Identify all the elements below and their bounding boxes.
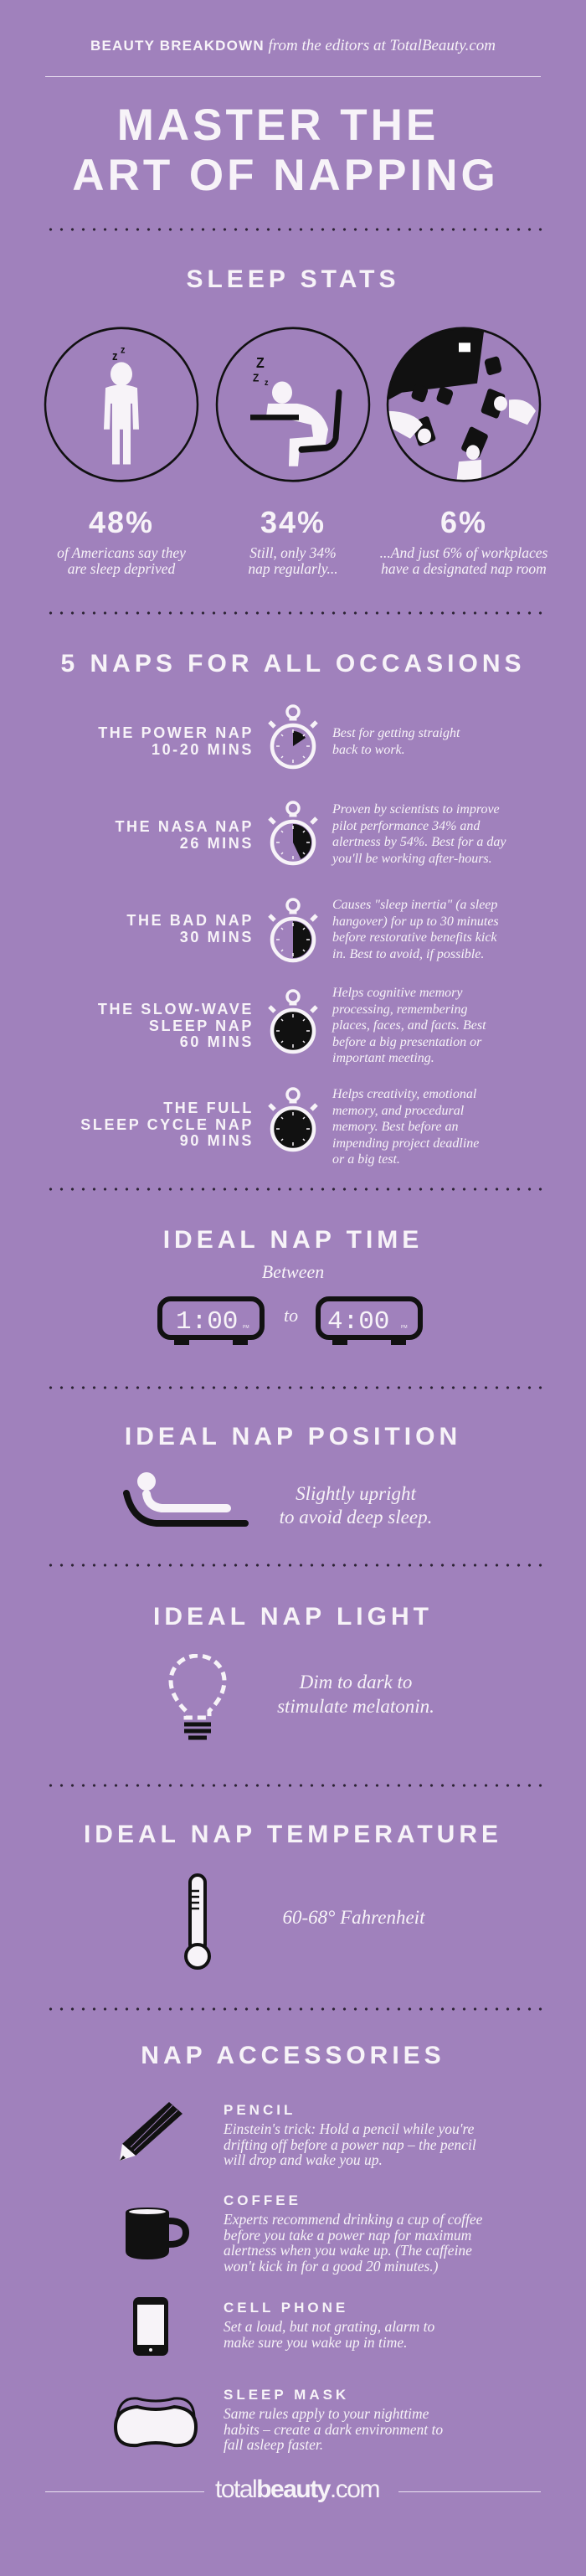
nap: slow-wave: THE SLOW-WAVE: [98, 1001, 254, 1018]
desc: slow-wave: Helps cognitive memory: [332, 986, 463, 1000]
stat: 34%: nap regularly...: [248, 559, 338, 576]
text: temperature: 60-68° Fahrenheit: [283, 1907, 424, 1928]
icon: sleepy person: z: [121, 345, 126, 356]
nap: bad: 30 MINS: [180, 928, 254, 945]
nap: power: THE POWER NAP: [98, 724, 254, 741]
desc: slow-wave: important meeting.: [332, 1051, 434, 1065]
icon: coffee mug: [126, 2208, 189, 2259]
nap: full cycle: 90 MINS: [180, 1132, 254, 1149]
accessory: sleep mask: SLEEP MASK: [224, 2387, 349, 2403]
desc: slow-wave: before a big presentation or: [332, 1035, 481, 1048]
icon: nap room: [387, 327, 541, 482]
desc: slow-wave: [332, 986, 486, 1065]
accessory: cell phone: [224, 2300, 434, 2351]
heading: nap accessories: NAP ACCESSORIES: [141, 2042, 445, 2069]
accessory: coffee: Experts recommend drinking a cup of coffee: [224, 2211, 482, 2228]
text: position: to avoid deep sleep.: [280, 1507, 432, 1528]
icon: clock 1pm: 1:00: [176, 1307, 238, 1337]
desc: nasa: [332, 802, 506, 866]
icon: thermometer: [184, 1873, 211, 1970]
stat: 34%: Still, only 34%: [249, 544, 337, 561]
accessory: sleep mask: [224, 2387, 443, 2453]
desc: nasa: Proven by scientists to improve: [332, 802, 500, 817]
accessory: cell phone: CELL PHONE: [224, 2300, 348, 2316]
stopwatch: power: [268, 704, 318, 769]
desc: power: Best for getting straight: [332, 726, 460, 740]
icon: clock 4pm: PM: [401, 1325, 407, 1330]
text: light: [277, 1672, 434, 1717]
desc: full cycle: or a big test.: [332, 1152, 400, 1167]
accessory: cell phone: Set a loud, but not grating, alarm to: [224, 2318, 434, 2335]
nap: slow-wave: 60 MINS: [180, 1033, 254, 1050]
heading: sleep stats: SLEEP STATS: [186, 265, 400, 293]
accessory: coffee: [223, 2192, 482, 2275]
stat: 34%: 34%: [260, 505, 326, 539]
desc: bad: [332, 898, 499, 961]
icon: clock 1pm: PM: [243, 1325, 249, 1330]
icon: clock 4pm: [316, 1296, 423, 1345]
accessory: pencil: PENCIL: [224, 2102, 296, 2118]
heading: ideal nap light: IDEAL NAP LIGHT: [153, 1603, 433, 1631]
text: between: Between: [262, 1261, 324, 1282]
desc: nasa: alertness by 54%. Best for a day: [332, 835, 506, 849]
icon: sleepy person: z: [112, 350, 118, 363]
heading: ideal nap time: IDEAL NAP TIME: [163, 1226, 423, 1254]
heading: ideal nap temperature: IDEAL NAP TEMPERATURE: [84, 1821, 502, 1848]
nap: nasa: 26 MINS: [180, 834, 254, 851]
stat: 48%: 48%: [89, 505, 154, 539]
stopwatch: slow-wave: [268, 989, 318, 1054]
icon: cell phone: [133, 2297, 168, 2356]
icon: sleepy person: [45, 328, 198, 481]
icon: reclining person: [123, 1472, 249, 1527]
icon: bulb: [169, 1654, 226, 1740]
nap: slow-wave: SLEEP NAP: [149, 1017, 254, 1033]
nap: power: 10-20 MINS: [152, 740, 254, 757]
desc: full cycle: memory, and procedural: [332, 1104, 464, 1117]
accessory: pencil: Einstein's trick: Hold a pencil while you're: [224, 2120, 474, 2137]
accessory: cell phone: make sure you wake up in time.: [224, 2333, 408, 2350]
stat: 48%: [57, 505, 186, 577]
stat: 48%: of Americans say they: [57, 544, 186, 561]
text: light: Dim to dark to: [300, 1672, 412, 1692]
icon: person asleep at desk: Z: [256, 354, 265, 371]
icon: clock 4pm: 4:00: [327, 1307, 389, 1337]
icon: sleep mask: [114, 2397, 198, 2447]
desc: nasa: you'll be working after-hours.: [332, 851, 492, 866]
accessory: pencil: will drop and wake you up.: [224, 2151, 383, 2168]
title: [72, 100, 499, 200]
footer logo: totalbeauty.com: [215, 2476, 379, 2503]
stat: 48%: are sleep deprived: [68, 559, 175, 576]
accessory: coffee: before you take a power nap for maximum: [224, 2226, 471, 2243]
desc: full cycle: memory. Best before an: [332, 1120, 458, 1134]
icon: person asleep at desk: Z: [253, 372, 260, 384]
accessory: coffee: won't kick in for a good 20 minutes.): [224, 2258, 439, 2275]
nap: power: [98, 724, 254, 757]
desc: power: back to work.: [332, 742, 405, 757]
nap: nasa: THE NASA NAP: [115, 818, 254, 835]
accessory: sleep mask: habits – create a dark environment to: [224, 2420, 443, 2437]
desc: full cycle: impending project deadline: [332, 1136, 479, 1151]
nap: nasa: [115, 818, 254, 851]
stat: 6%: have a designated nap room: [381, 559, 547, 576]
title: MASTER THE: [117, 100, 439, 150]
text: to: to: [284, 1305, 298, 1326]
desc: slow-wave: processing, remembering: [332, 1002, 467, 1017]
desc: bad: in. Best to avoid, if possible.: [332, 946, 484, 961]
stopwatch: bad: [268, 898, 318, 963]
stat: 6%: ...And just 6% of workplaces: [380, 544, 547, 561]
stat: 6%: [380, 505, 547, 577]
desc: power: [332, 726, 460, 757]
desc: slow-wave: places, faces, and facts. Best: [332, 1018, 486, 1033]
nap: full cycle: THE FULL: [163, 1100, 254, 1116]
stat: 6%: 6%: [440, 505, 487, 539]
desc: bad: Causes "sleep inertia" (a sleep: [332, 898, 497, 912]
desc: full cycle: [332, 1087, 479, 1167]
nap: bad: THE BAD NAP: [126, 912, 254, 929]
accessory: sleep mask: fall asleep faster.: [224, 2436, 323, 2453]
icon: pencil: [120, 2102, 182, 2161]
text: position: [280, 1483, 432, 1528]
icon: person asleep at desk: [217, 328, 369, 481]
desc: nasa: pilot performance 34% and: [332, 819, 480, 832]
icon: clock 1pm: [157, 1296, 265, 1345]
stats icons: [44, 327, 541, 482]
heading: ideal nap position: IDEAL NAP POSITION: [125, 1423, 461, 1450]
stopwatch: full cycle: [268, 1087, 318, 1152]
title: ART OF NAPPING: [72, 151, 499, 200]
accessory: coffee: COFFEE: [224, 2192, 301, 2208]
text: light: stimulate melatonin.: [277, 1696, 434, 1717]
desc: bad: hangover) for up to 30 minutes: [332, 914, 499, 928]
heading: 5 naps: 5 NAPS FOR ALL OCCASIONS: [60, 650, 526, 677]
stat: 34%: [248, 505, 338, 577]
accessory: coffee: alertness when you wake up. (The caffeine: [224, 2242, 472, 2259]
nap: slow-wave: [98, 1001, 254, 1050]
nap: full cycle: [80, 1100, 254, 1149]
desc: bad: before restorative benefits kick: [332, 930, 497, 945]
stopwatch: nasa: [268, 801, 318, 866]
nap: full cycle: SLEEP CYCLE NAP: [80, 1115, 254, 1132]
accessory: sleep mask: Same rules apply to your nighttime: [224, 2405, 429, 2422]
icon: person asleep at desk: z: [265, 379, 269, 388]
accessory: pencil: drifting off before a power nap – the pencil: [224, 2136, 476, 2152]
text: position: Slightly upright: [296, 1483, 416, 1504]
desc: full cycle: Helps creativity, emotional: [332, 1087, 476, 1101]
accessory: pencil: [223, 2102, 476, 2168]
nap: bad: [126, 912, 254, 945]
header: BEAUTY BREAKDOWN from the editors at TotalBeauty.com: [90, 37, 496, 54]
